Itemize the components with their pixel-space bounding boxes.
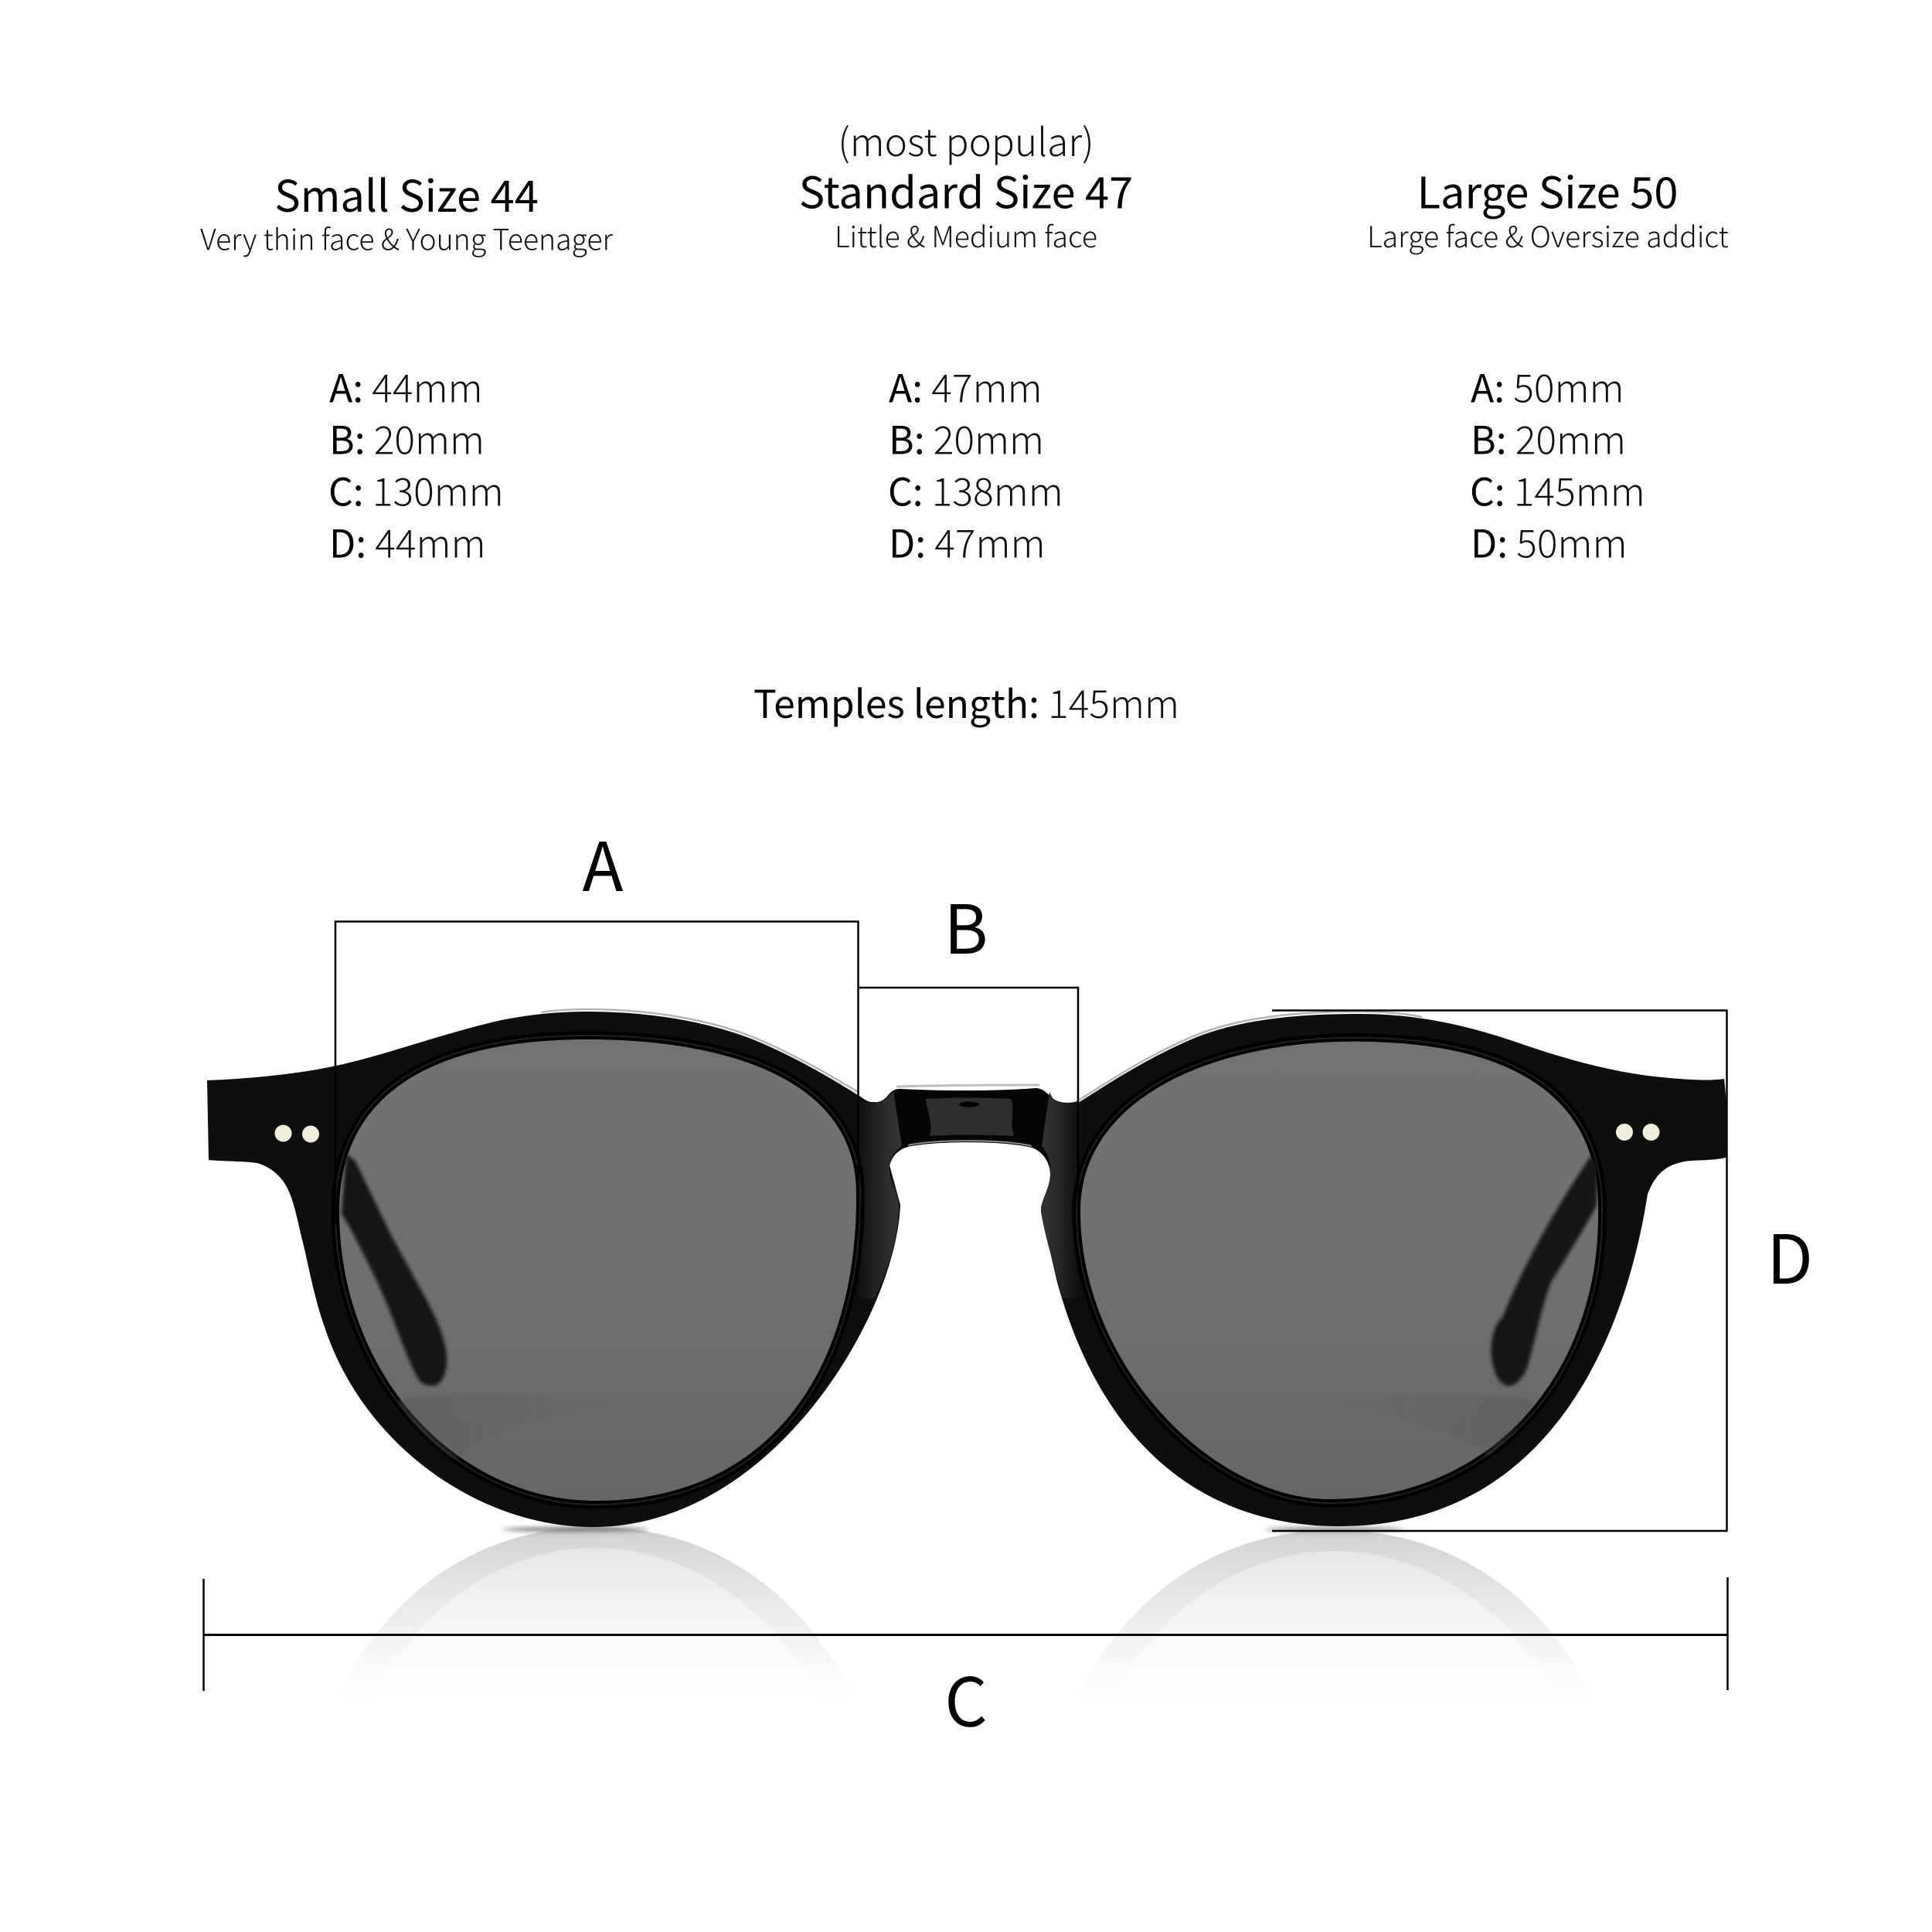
bridge dark notch [959, 1102, 979, 1107]
reflection: left lens [337, 1527, 854, 1699]
measurements: small size: B: 20mm [329, 410, 485, 465]
right temple seen through lens [1492, 1155, 1597, 1386]
heading: standard size: Little & Medium face [835, 214, 1097, 256]
right frame [1041, 1014, 1727, 1526]
sunglasses [207, 1009, 1727, 1527]
measurements: large size: B: 20mm [1471, 410, 1626, 465]
left frame [207, 1012, 900, 1527]
dimension C bracket [203, 1577, 1728, 1691]
measurements: large size: D: 50mm [1471, 513, 1628, 569]
bridge pillar left [859, 1091, 902, 1298]
heading: standard size: Standard Size 47 [799, 159, 1133, 221]
measurements: large size [1470, 359, 1645, 569]
label D: D [1767, 1206, 1813, 1304]
bridge [859, 1085, 1077, 1298]
measurements: small size [328, 359, 504, 569]
measurements: small size: A: 44mm [329, 359, 483, 414]
measurements: large size: C: 145mm [1470, 462, 1645, 518]
right rim highlight [1078, 1012, 1422, 1100]
measurements: standard size: A: 47mm [889, 359, 1043, 414]
left lens [338, 1038, 858, 1502]
bridge shine patch [926, 1097, 1014, 1136]
measurements: standard size [888, 359, 1063, 569]
dimension D bracket [1272, 1011, 1726, 1531]
right lens floor reflection [1267, 1396, 1536, 1457]
temples length: Temples length: 145mm [753, 674, 1179, 730]
measurements: standard size: B: 20mm [889, 410, 1044, 465]
measurements: standard size: D: 47mm [889, 513, 1046, 569]
measurements: small size: D: 44mm [329, 513, 486, 569]
bridge rim highlight [896, 1085, 1039, 1087]
heading: small size: Very thin face & Young Teenager [200, 216, 614, 258]
heading: large size: Large Size 50 [1417, 159, 1678, 221]
dimension B bracket [858, 988, 1078, 1221]
label B: B [944, 876, 988, 974]
heading: small size: Small Size 44 [274, 162, 539, 225]
dimension A bracket [335, 921, 858, 1225]
bridge underside highlight [908, 1141, 1032, 1146]
left rivets [275, 1125, 319, 1142]
bridge pillar right [1041, 1092, 1077, 1298]
heading: standard size [799, 113, 1133, 256]
left rim highlight [541, 1009, 859, 1093]
heading: large size [1367, 159, 1729, 256]
label A: A [583, 814, 624, 911]
heading: standard size: (most popular) [838, 113, 1094, 168]
reflection: right lens [1077, 1527, 1594, 1699]
left lens floor reflection [398, 1395, 680, 1461]
measurements: small size: C: 130mm [328, 462, 504, 518]
right rivets [1616, 1124, 1660, 1141]
measurements: large size: A: 50mm [1471, 359, 1624, 414]
measurements: standard size: C: 138mm [888, 462, 1063, 518]
heading: large size: Large face & Oversize addict [1367, 214, 1729, 256]
heading: small size [200, 162, 614, 258]
left temple seen through lens [342, 1154, 447, 1386]
right lens [1079, 1040, 1600, 1501]
label C: C [944, 1649, 988, 1747]
